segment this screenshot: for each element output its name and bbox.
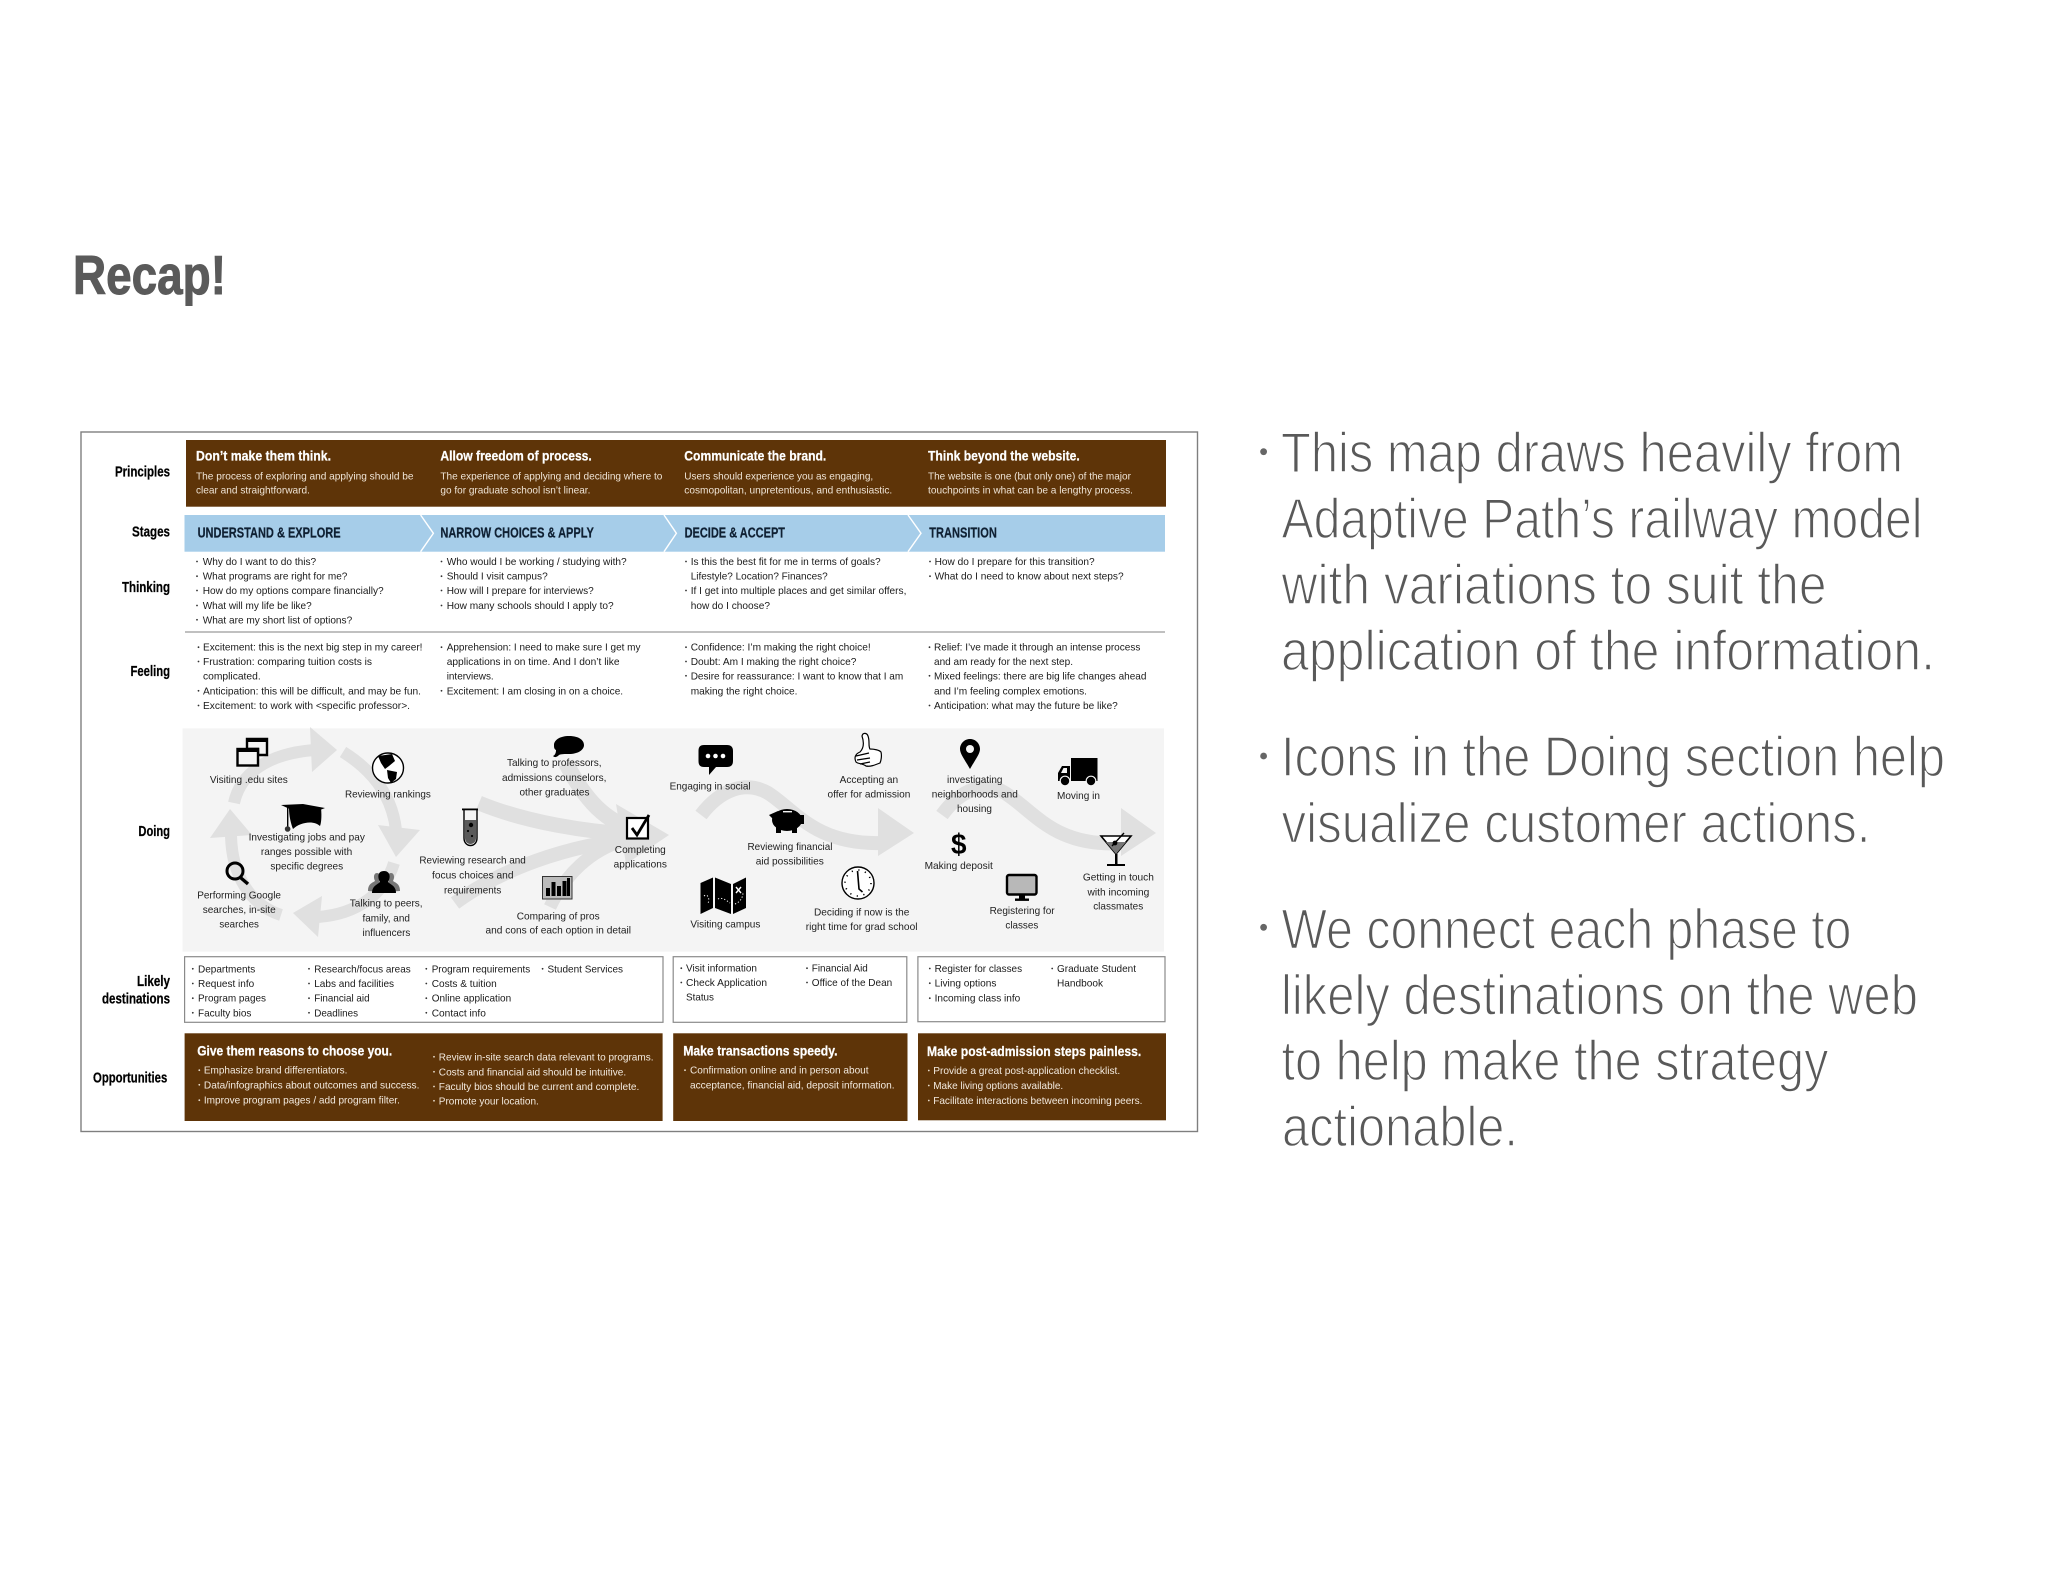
labels: doing actions: Making deposit [925, 861, 993, 872]
row: opportunities: acceptance, financial aid, deposit information. [690, 1080, 895, 1091]
row: opportunities: Promote your location. [439, 1096, 539, 1107]
row: thinking: Why do I want to do this? [203, 557, 316, 568]
labels: doing actions: searches, in-site [203, 905, 276, 916]
icon: speech bubble [553, 736, 584, 757]
row: stages: DECIDE & ACCEPT [685, 525, 785, 541]
row: feeling: interviews. [447, 671, 494, 682]
row: opportunities: Emphasize brand differentiators. [204, 1066, 347, 1077]
text block: bullet 3: to help make the strategy [1282, 1029, 1829, 1093]
row: feeling: making the right choice. [691, 686, 798, 697]
labels: doing actions: with incoming [1087, 887, 1150, 898]
text block: bullet 1 [1260, 421, 1935, 683]
labels: doing actions: ranges possible with [261, 847, 352, 858]
row: doing: Doing [138, 824, 170, 840]
arrow: wave one [701, 787, 914, 856]
text block: bullet 3: actionable. [1282, 1095, 1518, 1159]
labels: doing actions: right time for grad school [806, 922, 918, 933]
row: likely destinations: Financial Aid [812, 964, 868, 975]
row: likely destinations: Departments [198, 964, 255, 975]
row: stages [132, 515, 1165, 552]
row: principles: touchpoints in what can be a lengthy process. [928, 485, 1133, 496]
row: opportunities: Provide a great post-application checklist. [933, 1066, 1120, 1077]
row: opportunities: Opportunities [93, 1070, 167, 1086]
row: likely destinations: Likely [137, 974, 170, 990]
labels: doing actions: Reviewing research and [419, 856, 526, 867]
row: feeling: Excitement: this is the next big step in my career! [203, 643, 422, 654]
icon: people [368, 871, 400, 893]
icon: truck [1058, 758, 1098, 786]
labels: doing actions: family, and [362, 913, 410, 924]
icon: browser windows [237, 738, 268, 766]
row: likely destinations: Office of the Dean [812, 978, 892, 989]
labels: doing actions: Getting in touch [1083, 872, 1154, 883]
labels: doing actions: and cons of each option in detail [486, 926, 631, 937]
row: opportunities: Give them reasons to choose you. [197, 1042, 392, 1058]
row: feeling: Excitement: to work with <specific professor>. [203, 701, 410, 712]
icon: campus map [700, 878, 746, 914]
row: thinking: How will I prepare for interviews? [447, 586, 594, 597]
row: thinking: What programs are right for me? [203, 572, 348, 583]
row: opportunities: Review in-site search data relevant to programs. [439, 1052, 654, 1063]
row: thinking: How do I prepare for this transition? [935, 557, 1095, 568]
row: stages: TRANSITION [929, 525, 997, 541]
labels: doing actions: classes [1005, 920, 1038, 931]
text block: bullet 3: likely destinations on the web [1281, 963, 1918, 1027]
icon: globe [372, 753, 404, 783]
labels: doing actions: Comparing of pros [517, 911, 600, 922]
row: thinking: What will my life be like? [203, 601, 312, 612]
row: likely destinations: Request info [198, 979, 254, 990]
labels: doing actions: Engaging in social [670, 782, 751, 793]
text block: bullet 1: This map draws heavily from [1281, 421, 1903, 485]
labels: doing actions: offer for admission [828, 790, 911, 801]
row: feeling: Doubt: Am I making the right choice? [691, 657, 857, 668]
row: opportunities [93, 1033, 1166, 1121]
labels: doing actions: investigating [947, 775, 1003, 786]
labels: doing actions: Deciding if now is the [814, 908, 910, 919]
labels: doing actions: Completing [615, 845, 666, 856]
row: likely destinations: Program requirements [432, 964, 530, 975]
labels: doing actions: Talking to peers, [350, 899, 423, 910]
row: likely destinations: Financial aid [314, 994, 370, 1005]
row: likely destinations: Handbook [1057, 979, 1104, 990]
row: principles: cosmopolitan, unpretentious, and enthusiastic. [684, 485, 892, 496]
icon: graduation cap [281, 804, 325, 832]
row: stages: Stages [132, 525, 170, 541]
row: likely destinations: Contact info [432, 1008, 486, 1019]
row: principles: The process of exploring and applying should be [196, 471, 414, 482]
row: opportunities: Facilitate interactions between incoming peers. [933, 1096, 1142, 1107]
row: principles [115, 440, 1166, 507]
icon: bar chart [542, 876, 572, 899]
row: principles: Think beyond the website. [928, 448, 1080, 464]
arrow: wave two [942, 787, 1156, 856]
icon: clock [842, 867, 874, 899]
row: likely destinations: Costs & tuition [432, 979, 497, 990]
row: feeling [130, 643, 1147, 712]
row: thinking: How do my options compare financially? [203, 586, 384, 597]
row: principles: Principles [115, 465, 170, 481]
labels: doing actions: Talking to professors, [507, 758, 602, 769]
row: thinking: how do I choose? [691, 601, 770, 612]
text block: bullet 2 [1260, 725, 1945, 855]
row: feeling: Confidence: I’m making the right choice! [691, 643, 871, 654]
row: feeling: Relief: I’ve made it through an intense process [934, 643, 1140, 654]
labels: doing actions: housing [957, 804, 992, 815]
labels: doing actions: neighborhoods and [932, 790, 1018, 801]
row: thinking: Who would I be working / studying with? [447, 557, 627, 568]
row: opportunities: Make living options available. [933, 1081, 1063, 1092]
row: principles: The website is one (but only one) of the major [928, 471, 1131, 482]
labels: doing actions: Visiting .edu sites [210, 775, 288, 786]
row: likely destinations: Check Application [686, 978, 767, 989]
row: likely destinations: Status [686, 993, 714, 1004]
row: feeling: Anticipation: what may the future be like? [934, 701, 1118, 712]
row: feeling: Desire for reassurance: I want to know that I am [691, 671, 903, 682]
row: likely destinations: Register for classes [935, 964, 1022, 975]
row: thinking: Thinking [122, 580, 170, 596]
text block: bullet 1: with variations to suit the [1281, 553, 1826, 617]
row: opportunities: Confirmation online and in person about [690, 1066, 869, 1077]
icon: map pin [960, 739, 980, 769]
row: feeling: complicated. [203, 671, 261, 682]
row: feeling: Feeling [130, 664, 170, 680]
labels: doing actions: searches [219, 920, 259, 931]
row: thinking: Is this the best fit for me in terms of goals? [691, 557, 881, 568]
icon: dollar sign: $ [951, 829, 966, 861]
row: feeling: Anticipation: this will be difficult, and may be fun. [203, 686, 421, 697]
row: stages: NARROW CHOICES & APPLY [440, 525, 594, 541]
row: thinking: If I get into multiple places and get similar offers, [691, 586, 906, 597]
row: opportunities: Make transactions speedy. [683, 1042, 838, 1058]
text block: bullet 3 [1260, 897, 1918, 1159]
row: opportunities: Make post-admission steps painless. [927, 1043, 1141, 1059]
row: likely destinations: Graduate Student [1057, 964, 1136, 975]
row: feeling: and I’m feeling complex emotions. [934, 686, 1087, 697]
row: likely destinations: Faculty bios [198, 1008, 251, 1019]
icon: test tube [462, 808, 478, 846]
row: doing [138, 727, 1164, 952]
labels: doing actions: Performing Google [197, 890, 281, 901]
row: likely destinations: Research/focus areas [314, 964, 411, 975]
row: thinking: How many schools should I apply to? [447, 601, 614, 612]
row: principles: Allow freedom of process. [440, 448, 592, 464]
row: principles: The experience of applying and deciding where to [440, 471, 663, 482]
labels: doing actions: admissions counselors, [502, 773, 606, 784]
arrows: converging decision paths [455, 763, 669, 907]
icon: chat bubble [698, 745, 733, 775]
text block: bullet 1: application of the information. [1281, 619, 1935, 683]
row: principles: Communicate the brand. [684, 448, 826, 464]
labels: doing actions: influencers [362, 928, 410, 939]
title: Recap! [73, 244, 226, 306]
labels: doing actions: classmates [1093, 902, 1143, 913]
row: feeling: Apprehension: I need to make sure I get my [447, 643, 641, 654]
icon: checkbox [627, 815, 649, 838]
row: feeling: Mixed feelings: there are big life changes ahead [934, 671, 1147, 682]
text block: bullet 3: We connect each phase to [1282, 897, 1852, 961]
row: principles: clear and straightforward. [196, 485, 310, 496]
row: principles: Don’t make them think. [196, 448, 331, 464]
row: thinking [122, 557, 1124, 626]
row: principles: Users should experience you as engaging, [684, 471, 873, 482]
labels: doing actions: Accepting an [840, 775, 898, 786]
row: likely destinations: Incoming class info [935, 994, 1021, 1005]
icon: piggy bank [769, 809, 804, 833]
row: opportunities: Data/infographics about outcomes and success. [204, 1080, 419, 1091]
row: thinking: Lifestyle? Location? Finances? [691, 572, 828, 583]
text block: bullet 2: Icons in the Doing section help [1281, 725, 1945, 789]
labels: doing actions: Registering for [990, 906, 1055, 917]
labels: doing actions: applications [614, 860, 667, 871]
row: thinking: What do I need to know about next steps? [935, 572, 1124, 583]
row: feeling: applications in on time. And I don’t like [447, 657, 620, 668]
row: likely destinations: Program pages [198, 994, 266, 1005]
labels: doing actions: focus choices and [432, 870, 514, 881]
row: principles: go for graduate school isn’t linear. [440, 485, 590, 496]
labels: doing actions: Visiting campus [690, 919, 760, 930]
row: thinking: What are my short list of options? [203, 615, 352, 626]
row: likely destinations: destinations [102, 991, 170, 1007]
labels: doing actions [197, 758, 1154, 939]
row: stages: UNDERSTAND & EXPLORE [198, 525, 341, 541]
labels: doing actions: Investigating jobs and pay [249, 832, 366, 843]
row: likely destinations: Labs and facilities [314, 979, 394, 990]
row: feeling: Excitement: I am closing in on a choice. [447, 686, 623, 697]
labels: doing actions: Reviewing rankings [345, 790, 431, 801]
labels: doing actions: Moving in [1057, 791, 1100, 802]
labels: doing actions: aid possibilities [756, 857, 824, 868]
icon: thumbs up [855, 733, 881, 766]
row: opportunities: Improve program pages / add program filter. [204, 1096, 400, 1107]
row: likely destinations: Student Services [548, 964, 623, 975]
row: thinking: Should I visit campus? [447, 572, 548, 583]
panel: experience map [81, 432, 1198, 1132]
text block: bullet 2: visualize customer actions. [1282, 791, 1870, 855]
row: likely destinations: Living options [935, 979, 996, 990]
row: opportunities: Costs and financial aid should be intuitive. [439, 1067, 626, 1078]
labels: doing actions: other graduates [520, 787, 590, 798]
row: opportunities: Faculty bios should be current and complete. [439, 1082, 639, 1093]
row: likely destinations: Visit information [686, 964, 757, 975]
row: feeling: Frustration: comparing tuition costs is [203, 657, 372, 668]
labels: doing actions: Reviewing financial [748, 842, 832, 853]
row: feeling: and am ready for the next step. [934, 657, 1073, 668]
row: likely destinations: Online application [432, 994, 511, 1005]
icon: martini glass [1101, 833, 1131, 866]
row: likely destinations [102, 957, 1165, 1022]
labels: doing actions: specific degrees [270, 862, 343, 873]
icon: magnifier [227, 863, 248, 884]
labels: doing actions: requirements [444, 885, 501, 896]
arrows: circular research loop [210, 727, 420, 937]
text block: bullet 1: Adaptive Path’s railway model [1282, 487, 1922, 551]
row: likely destinations: Deadlines [314, 1008, 358, 1019]
icon: monitor [1007, 875, 1036, 901]
